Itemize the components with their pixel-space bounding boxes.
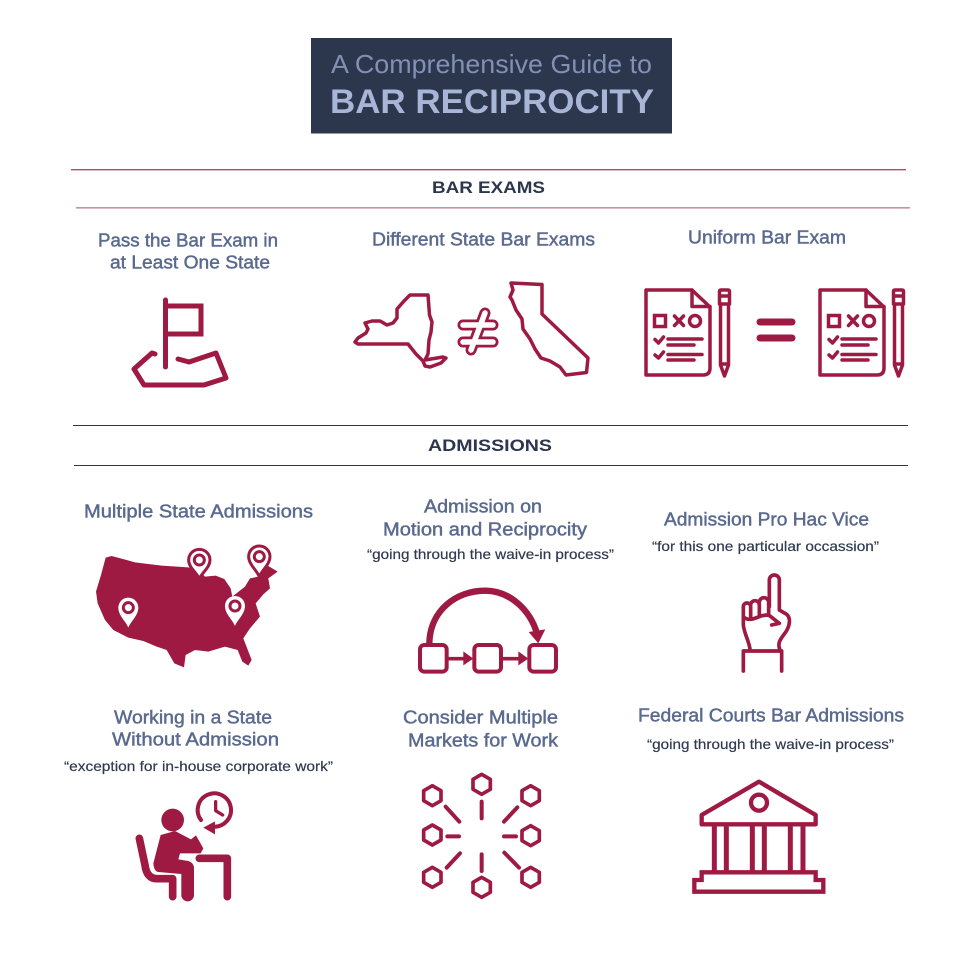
icon: new york outline xyxy=(355,295,446,367)
panel: admission pro hac vice: “for this one particular occassion” xyxy=(652,538,879,554)
panel: multiple state admissions: Multiple State Admissions xyxy=(84,502,313,522)
panel: consider multiple markets xyxy=(403,708,559,897)
panel: admission on motion and reciprocity: Admission on xyxy=(424,496,542,516)
panel: working in a state without admission: Working in a State xyxy=(114,708,272,728)
icon: us map with pins xyxy=(96,546,278,667)
panel: admission pro hac vice: Admission Pro Hac Vice xyxy=(664,510,869,530)
panel: uniform bar exam xyxy=(646,228,904,376)
panel: working in a state without admission: Without Admission xyxy=(112,730,279,750)
icon: courthouse xyxy=(694,782,823,892)
icon: exam sheet and pencil xyxy=(646,290,730,376)
panel: admission on motion and reciprocity: “going through the waive-in process” xyxy=(367,546,614,562)
icon: equals sign xyxy=(760,322,792,338)
panel: pass the bar exam xyxy=(98,230,278,385)
panel: admission on motion and reciprocity: Motion and Reciprocity xyxy=(383,520,587,540)
panel: different state bar exams: Different State Bar Exams xyxy=(372,230,595,250)
icon: person at desk with clock xyxy=(139,793,231,901)
panel: working in a state without admission xyxy=(64,708,333,901)
panel: multiple state admissions xyxy=(84,502,313,667)
panel: admission on motion and reciprocity xyxy=(367,496,614,672)
icon: hexagon network xyxy=(424,774,539,897)
panel: consider multiple markets: Markets for Work xyxy=(408,730,559,750)
panel: federal courts bar admissions xyxy=(638,706,904,892)
panel: federal courts bar admissions: Federal Courts Bar Admissions xyxy=(638,706,904,726)
icon: process loop arrows xyxy=(420,591,556,672)
icon: not equal sign xyxy=(463,313,493,350)
icon: raised finger hand xyxy=(743,575,789,671)
section heading: admissions: ADMISSIONS xyxy=(428,436,552,455)
panel: pass the bar exam: Pass the Bar Exam in xyxy=(98,230,278,250)
panel: different state bar exams xyxy=(355,230,595,375)
title banner xyxy=(311,38,672,134)
section heading: bar exams: BAR EXAMS xyxy=(432,178,545,197)
panel: admission pro hac vice xyxy=(652,510,879,671)
panel: uniform bar exam: Uniform Bar Exam xyxy=(688,228,846,248)
panel: federal courts bar admissions: “going through the waive-in process” xyxy=(647,736,894,752)
panel: working in a state without admission: “exception for in-house corporate work” xyxy=(64,758,333,774)
icon: second exam sheet and pencil xyxy=(820,290,904,376)
icon: flag on land xyxy=(134,300,226,385)
title banner: BAR RECIPROCITY xyxy=(330,83,654,121)
panel: consider multiple markets: Consider Multiple xyxy=(403,708,558,728)
panel: pass the bar exam: at Least One State xyxy=(110,252,270,272)
icon: california outline xyxy=(510,283,588,375)
title banner: A Comprehensive Guide to xyxy=(331,49,652,79)
